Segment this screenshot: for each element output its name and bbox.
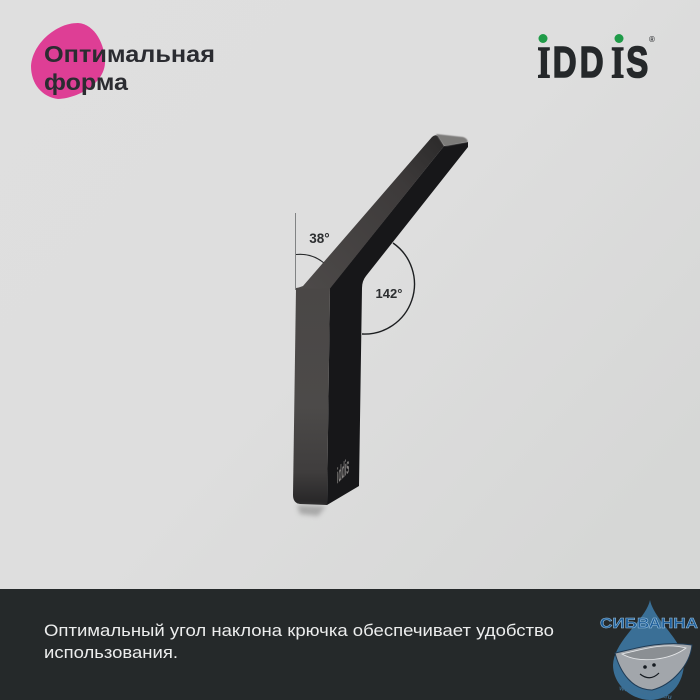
bottom shadow under hook [297,505,326,516]
drop [613,600,684,700]
title: форма [44,69,128,95]
angle annotation: 38 degrees [296,213,330,290]
bottom band [0,589,700,700]
title: Оптимальная [44,41,215,67]
hook engraved logo: iddis [337,453,349,489]
registered mark: ® [649,35,655,44]
logo wordmark: S [626,39,648,87]
angle annotation: 142 degrees [362,243,414,334]
hook grey front face [293,287,330,505]
angle annotation: 38 degrees: 38° [309,231,330,246]
watermark logo [600,600,698,700]
bath face [640,663,659,678]
hook arm face [296,135,444,288]
hook tip highlight [436,134,468,146]
angle annotation: 142 degrees: 142° [376,286,402,301]
logo wordmark: D [580,39,604,87]
brand text: СИБВАННА [600,615,698,632]
description text: Оптимальный угол наклона крючка обеспечивает удобство [44,621,554,640]
description text: использования. [44,643,178,662]
wall hook [293,134,468,505]
bath rim [622,646,686,660]
pink blob [31,23,105,99]
logo wordmark: I [538,39,550,87]
logo wordmark: I [611,39,624,87]
hook black side [327,142,468,505]
bath [615,644,692,690]
IDDIS logo [538,34,655,87]
logo dots [538,34,548,43]
logo wordmark: D [553,39,577,87]
